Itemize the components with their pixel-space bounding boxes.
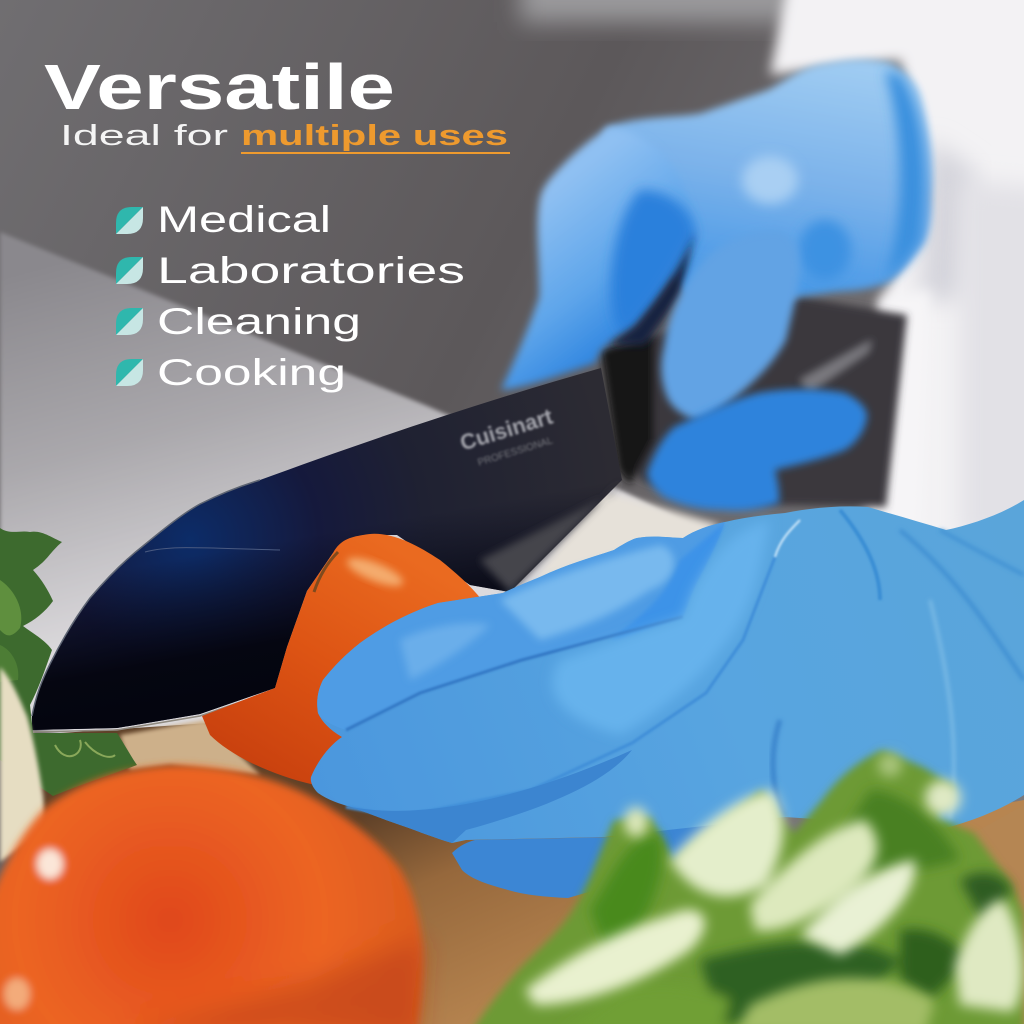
subtitle xyxy=(60,120,510,154)
foreground lettuce xyxy=(470,750,1024,1024)
item: Laboratories: Laboratories xyxy=(157,250,465,291)
item: Cleaning: Cleaning xyxy=(157,301,361,342)
knife blade xyxy=(32,368,622,732)
subtitle: multiple uses xyxy=(241,120,508,152)
left finger xyxy=(501,127,695,390)
lower thumb xyxy=(647,389,867,511)
list: uses xyxy=(116,199,465,393)
top finger xyxy=(317,522,725,730)
bright knuckle area xyxy=(552,520,770,735)
lower glove hand xyxy=(311,500,1024,898)
item: Laboratories xyxy=(116,250,465,291)
wrist folds xyxy=(840,510,880,600)
foreground tomato xyxy=(0,765,423,1024)
item: Cleaning xyxy=(116,301,361,342)
thumb xyxy=(452,800,760,898)
text: knife brand: PROFESSIONAL xyxy=(477,435,555,469)
pale vegetable stem left xyxy=(0,667,46,862)
item: Medical: Medical xyxy=(157,199,331,240)
lettuce left xyxy=(0,528,137,796)
back of hand xyxy=(604,59,932,300)
item: Cooking xyxy=(116,352,346,393)
knife handle xyxy=(600,297,907,507)
item: Cooking: Cooking xyxy=(157,352,346,393)
index finger xyxy=(661,230,799,420)
tomato being cut xyxy=(202,534,482,785)
pocket shadow xyxy=(610,522,725,640)
cutting board xyxy=(0,715,1024,1024)
second finger shadow line xyxy=(346,617,683,730)
upper glove hand (blurred) xyxy=(501,59,932,511)
subtitle: Ideal for xyxy=(60,120,229,152)
lower finger shadow xyxy=(346,557,775,817)
finger gap shadow xyxy=(610,232,695,345)
hand outline xyxy=(311,500,1024,843)
text: knife brand: Cuisinart xyxy=(457,404,556,456)
title: Versatile xyxy=(44,51,395,123)
item: Medical xyxy=(116,199,331,240)
